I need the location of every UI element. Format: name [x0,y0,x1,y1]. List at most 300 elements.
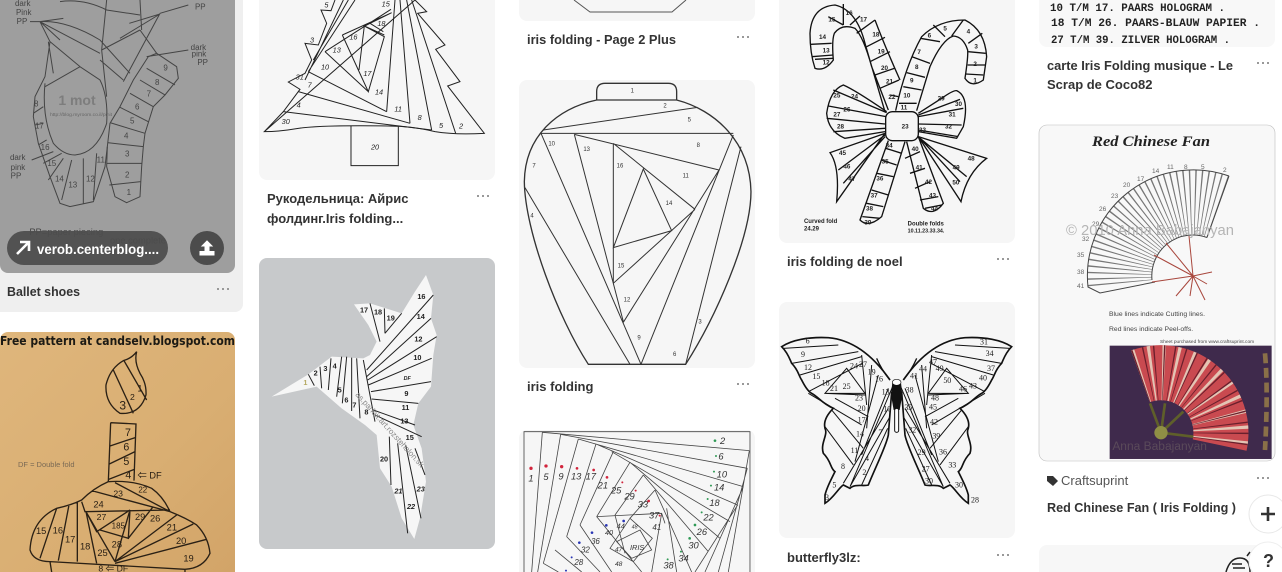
pattern labels: 14 [55,175,64,184]
panel: candle pattern on tan paper: 19 [183,554,194,564]
butterfly drawing: 24 [850,361,858,370]
panel: vase pattern: 10 [548,142,556,148]
spiral drawing: 32 [581,546,590,555]
pattern labels: 4 [124,131,129,140]
panel: candy canes pattern: 10.11.23.33.34. [908,228,945,234]
panel: candy canes pattern: 14 [819,34,827,41]
hummingbird drawing: 3 [323,364,327,373]
panel: christmas tree pin: 10 [321,62,330,71]
legend notes [1109,311,1254,345]
butterfly drawing: 23 [855,393,863,402]
butterfly drawing: 34 [986,349,994,358]
panel: candy canes pattern: 47 [848,176,856,183]
butterfly drawing: 19 [868,367,876,376]
panel: candy canes pattern: 34 [886,142,893,149]
panel: christmas tree pin: 11 [394,104,402,113]
pattern labels: PP [17,17,27,26]
fan diagram: 32 [1082,236,1090,243]
fan diagram [1077,164,1229,300]
butterfly drawing: 40 [979,373,987,382]
spiral drawing: 13 [571,471,582,481]
panel: candy canes pattern: 46 [843,163,851,170]
panel: candy canes pattern: 9 [910,77,914,84]
panel: candy canes pattern: 21 [886,78,894,85]
title: Russian caption: фолдинг.Iris folding... [267,211,403,226]
pattern labels: 6 [135,102,140,111]
butterfly drawing: 13 [882,387,890,396]
butterfly drawing: 29 [918,448,926,457]
icon: more dots [217,288,229,290]
title: iris folding - Page 2 Plus: iris folding - Page 2 Plus [527,32,676,47]
panel: candy canes pattern: 12 [823,59,830,66]
panel: christmas tree pin: 3 [310,36,315,45]
panel: candle pattern on tan paper: 1 [137,384,143,394]
panel: vase pattern: 13 [583,147,591,153]
butterfly drawing: 12 [804,363,812,372]
hummingbird drawing: 9 [404,389,408,398]
panel: vase pattern: 12 [624,298,631,304]
pattern labels: 17 [35,121,44,130]
source row: Craftsuprint: Craftsuprint [1061,473,1129,488]
butterfly drawing: 47 [929,357,937,366]
panel: candy canes pattern: 49 [953,164,960,171]
pattern labels: PP [195,2,206,11]
panel: red Chinese fan pattern [1039,125,1275,515]
panel: candy canes pattern: 22 [888,94,896,101]
pattern labels: 15 [47,159,57,168]
panel: candle pattern on tan paper: 27 [97,512,106,522]
panel: top pattern fragment with title [519,0,755,47]
panel: christmas tree pin: 18 [377,19,386,28]
panel: christmas tree pin: 7 [308,80,313,89]
note: DF = Double fold [18,460,74,469]
fan diagram: 2 [1223,167,1227,174]
pattern labels: 12 [86,175,95,184]
panel: candy canes pattern: 10 [903,93,911,100]
title: iris folding: iris folding [527,379,594,394]
butterfly drawing: 32 [908,425,916,434]
panel: hummingbird pattern [259,258,495,549]
watermark: © 2010 Anna Babajanyan [1066,222,1234,239]
panel: candy canes pattern: 16 [846,10,853,17]
butterfly drawing: 42 [930,417,938,426]
spiral drawing: 17 [586,471,597,481]
icon: more dots [737,36,749,38]
handwritten text: 27 T/M 39. ZILVER HOLOGRAM . [1051,35,1230,47]
panel: christmas tree pin: 5 [439,121,444,130]
panel: candy canes pattern: 40 [912,146,919,153]
panel: candy canes pattern: 39 [864,219,872,226]
butterfly drawing: 17 [858,415,866,424]
spiral drawing: 40 [605,528,614,537]
hummingbird drawing [272,275,437,539]
panel: christmas tree pin: 16 [349,32,358,41]
butterfly drawing: 49 [936,364,944,373]
fan diagram: 14 [1152,168,1160,175]
panel: candy canes pattern: 15 [828,17,836,24]
pattern labels: 7 [147,90,152,99]
panel: candle pattern on tan paper [0,332,235,572]
legend notes: Red lines indicate Peel-offs. [1109,326,1193,333]
pattern labels: PP [197,58,208,67]
fan diagram: 29 [1092,221,1100,228]
panel: candy canes pattern: 50 [952,180,960,187]
panel: christmas tree pin: 4 [297,100,301,109]
spiral drawing: 38 [663,560,675,570]
panel: candy canes pattern: 44 [931,206,939,213]
panel: candy canes pattern: 43 [929,192,937,199]
pattern labels: pink [11,163,25,172]
hummingbird drawing: 20 [380,455,388,464]
panel: christmas tree pin: 8 [418,113,423,122]
butterfly drawing: 5 [832,481,836,490]
panel: christmas tree pin: 13 [333,46,342,55]
panel: candy canes pattern: Double folds [908,221,945,227]
panel: christmas tree pin: 17 [363,69,372,78]
button: help [1249,542,1282,572]
source link pill [7,231,168,265]
fan diagram: 8 [1184,164,1188,171]
panel: candy canes pattern: 24 [851,93,859,100]
butterfly drawing: 37 [987,364,995,373]
spiral drawing: 26 [696,527,708,537]
fan diagram: 38 [1077,269,1085,276]
panel: vase pattern: 9 [637,336,641,342]
hummingbird drawing: 1 [303,378,307,387]
hummingbird drawing: 14 [417,312,426,321]
spiral drawing: 9 [558,471,564,481]
panel: candy canes pattern: 29 [938,96,945,103]
hummingbird drawing: 11 [402,403,409,412]
panel: christmas tree pin [259,0,495,226]
hummingbird drawing: 12 [414,335,422,344]
source link pill: verob.centerblog.... [37,241,159,257]
hummingbird drawing: 7 [352,401,356,410]
butterfly drawing: 38 [906,385,914,394]
pattern labels: 13 [68,180,78,189]
panel: vase pattern: 1 [631,89,635,95]
butterfly drawing: 41 [910,371,918,380]
butterfly drawing: 36 [939,447,947,456]
pattern labels: dark [10,153,26,162]
title: Ballet shoes: Ballet shoes [7,284,80,299]
spiral drawing: 47 [615,547,623,554]
butterfly drawing: 14 [856,430,864,439]
butterfly drawing: 8 [841,462,845,471]
panel: bottom pin fragment [1039,545,1275,572]
panel: candy canes pattern: 28 [837,123,845,130]
panel: vase pattern: 5 [688,118,692,124]
panel: candy canes pattern: 36 [876,175,884,182]
icon: more dots [477,195,489,197]
butterfly drawing: 6 [806,337,810,346]
panel: candy canes pattern: 2 [973,61,977,68]
panel: candy canes pattern: 38 [866,205,874,212]
panel: candy canes pattern: 4 [967,28,971,35]
panel: vase pattern: 2 [663,103,667,109]
hummingbird drawing: as.parfait.art.rozstehalon.sk [354,390,426,469]
fan diagram: 20 [1123,182,1131,189]
panel: handwritten notes pin [1039,0,1275,92]
spiral drawing: 48 [615,561,623,568]
spiral drawing: 14 [714,483,724,493]
spiral drawing: 29 [623,491,635,501]
butterfly drawing: 43 [969,381,977,390]
hummingbird drawing: 23 [416,485,425,494]
panel: candle pattern on tan paper: 24 [93,499,104,509]
panel: candle pattern on tan paper: 4 [125,469,131,481]
fan diagram: 35 [1077,252,1085,259]
hummingbird drawing: 10 [413,353,421,362]
butterfly drawing: 30 [955,480,963,489]
panel: candy canes pattern: 41 [916,165,923,172]
spiral drawing: 34 [678,554,689,564]
panel: candle pattern on tan paper: 185 [112,521,126,530]
butterfly drawing: 10 [883,405,891,414]
butterfly drawing: 45 [929,403,937,412]
panel: christmas tree pin: 30 [282,117,291,126]
panel: christmas tree pin: 14 [375,88,383,97]
fan diagram: 17 [1137,176,1145,183]
candy canes drawing [810,4,987,223]
pattern labels: dark [191,43,206,52]
panel: vase pattern: 6 [673,352,677,358]
legend notes: Blue lines indicate Cutting lines. [1109,311,1205,318]
caption: Free pattern at candselv.blogspot.com [0,333,235,348]
panel: vase pattern: 16 [617,164,624,170]
panel: candy canes pattern: 35 [882,158,889,165]
panel: candy canes pattern: 7 [917,49,921,56]
panel: candy canes pattern: 27 [833,112,841,119]
panel: candy canes pattern [779,0,1015,269]
butterfly drawing: 35 [904,403,912,412]
panel: christmas tree pin: 2 [458,122,463,131]
panel: christmas tree pin: 5 [324,0,329,9]
panel: spiral pattern [519,430,755,572]
pattern labels: 16 [41,143,50,152]
panel: candle pattern on tan paper: 22 [138,486,148,495]
spiral drawing: 37 [649,510,660,520]
panel: candle pattern on tan paper: 17 [65,535,75,545]
butterfly drawing: 3 [825,493,829,502]
panel: christmas tree pin: 20 [370,142,380,151]
pattern labels: pink [192,50,206,59]
pattern labels: 9 [163,64,168,73]
panel: candle pattern on tan paper: 26 [150,514,160,524]
spiral drawing: 25 [610,485,622,495]
pattern labels: 11 [97,156,106,165]
spiral drawing: 18 [709,498,721,508]
panel: candy canes pattern: 33 [919,127,927,134]
panel: candy canes pattern: 11 [901,104,908,111]
panel: candy canes pattern: 32 [945,124,953,131]
butterfly drawing: 27 [859,360,867,369]
panel: candy canes pattern: 8 [915,64,919,71]
candle drawing [30,352,210,572]
spiral drawing: 30 [688,540,700,550]
hummingbird drawing: 5 [338,385,342,394]
pattern labels: 8 [34,100,39,109]
hummingbird drawing: 17 [360,305,368,314]
fan diagram: 5 [1201,164,1205,171]
pattern labels: 3 [125,150,130,159]
butterfly drawing: 50 [943,376,951,385]
butterfly drawing: 16 [875,375,883,384]
icon: diagonal arrow [17,242,29,254]
butterfly drawing: 21 [830,384,838,393]
panel: christmas tree pin: 31 [296,72,304,81]
panel: candy canes pattern: 48 [968,156,975,163]
butterfly drawing: 33 [948,461,956,470]
hummingbird drawing: DF [404,376,411,382]
butterfly drawing: 31 [980,337,988,346]
icon: more dots [1257,477,1269,479]
butterfly drawing: 2 [862,468,866,477]
fan photo: Anna Babajanyan [1112,439,1207,453]
hummingbird drawing: 21 [393,486,402,495]
pattern labels: PP=paper piecing [29,227,103,237]
hummingbird drawing: 13 [400,416,408,425]
pattern labels: 8 [155,78,160,87]
hummingbird drawing: 15 [406,433,414,442]
panel: candy canes pattern: 25 [833,92,841,99]
panel: candy canes pattern: 26 [843,107,851,114]
spiral drawing: 41 [652,523,661,532]
panel: candle pattern on tan paper: 23 [113,489,123,499]
spiral drawing [524,432,750,572]
hummingbird drawing: 19 [387,314,395,323]
icon: more dots [737,383,749,385]
panel: candle pattern on tan paper: 5 [123,456,129,468]
spiral drawing: 28 [573,558,584,567]
pattern labels: 1 mot [58,92,96,108]
butterfly drawing: 18 [822,379,830,388]
fan heading: Red Chinese Fan [1091,134,1210,150]
pattern: tree drawing [264,0,484,166]
hummingbird drawing: 6 [344,396,348,405]
panel: candy canes pattern: 30 [955,101,963,108]
butterfly drawing: 46 [959,385,967,394]
fan diagram: 11 [1167,164,1174,171]
panel: candle pattern on tan paper: 25 [97,548,108,558]
butterfly drawing: 20 [858,404,866,413]
fan diagram: 41 [1077,283,1085,290]
panel: butterfly pattern [779,302,1015,565]
spiral drawing: 44 [617,521,625,530]
panel: ballet shoes pin [0,0,243,312]
panel: candle pattern on tan paper: 29 [135,512,145,522]
panel: candle pattern on tan paper: ⇐ DF [137,470,162,480]
panel: candy canes pattern: 5 [943,26,947,33]
panel: candy canes pattern: 23 [902,123,909,130]
spiral drawing: 21 [597,480,608,490]
title: Russian caption: Рукодельница: Айрис [267,191,408,206]
icon: tag [1047,476,1058,486]
butterfly drawing: 48 [931,393,939,402]
panel: candy canes pattern: 31 [949,111,956,118]
spiral drawing: 5 [543,472,549,482]
hummingbird drawing: 18 [374,307,382,316]
spiral drawing: 48 [632,524,638,530]
hummingbird drawing: 4 [333,361,338,370]
butterfly drawing: 27 [922,465,930,474]
butterfly drawing: 15 [812,372,820,381]
panel: candle pattern on tan paper: 7 [125,427,131,439]
panel: candy canes pattern: 37 [871,192,878,199]
panel: candle pattern on tan paper: 6 [123,442,129,454]
butterfly drawing: 30 [925,476,933,485]
pattern labels: 2 [125,170,130,179]
title: carte Iris Folding musique: Scrap de Coco82 [1047,77,1152,92]
hummingbird drawing: 8 [364,407,368,416]
panel: candy canes pattern: 20 [881,65,889,72]
panel: vase pattern: 7 [532,163,536,169]
spiral drawing: 2 [719,436,726,446]
hummingbird drawing: 16 [417,292,425,301]
panel: candy canes pattern: 6 [928,33,932,40]
spiral drawing: 1 [528,474,534,484]
panel: candy canes pattern: 3 [974,43,978,50]
icon: more dots [997,554,1009,556]
panel: candle pattern on tan paper: 15 [36,526,46,536]
pattern labels: Pink [16,8,32,17]
hummingbird drawing: 2 [314,369,318,378]
legend notes: Sheet purchased from www.craftsuprint.com [1160,339,1254,345]
spiral drawing: 36 [591,537,600,546]
butterfly drawing: 39 [932,431,940,440]
panel: candy canes pattern: 24.29 [804,226,820,232]
panel: candle pattern on tan paper: 28 [112,539,122,549]
butterfly drawing: 11 [851,446,858,455]
panel: candle pattern on tan paper: 18 [80,541,90,551]
panel: candy canes pattern: 18 [872,32,880,39]
panel: candy canes pattern: 1 [973,78,977,85]
panel: candle pattern on tan paper: 21 [167,523,177,533]
panel: candy canes pattern: 45 [839,150,847,157]
pattern labels: PP [11,171,21,180]
butterfly drawing: 4 [865,454,869,463]
panel: vase pattern [519,80,755,394]
panel: vase pattern: 8 [697,143,701,149]
pattern labels: http://blog.myroom.co.il/pinit [50,112,113,118]
panel: vase pattern: 3 [698,320,702,326]
panel: candy canes pattern: Curved fold [804,219,838,225]
pattern labels: 1 [127,188,132,197]
fan diagram: 23 [1111,193,1119,200]
panel: vase pattern: 4 [530,213,534,219]
panel: candy canes pattern: 42 [925,179,933,186]
icon: share button [190,231,224,265]
butterfly drawing [782,337,1012,504]
panel: vase pattern: 14 [666,201,673,207]
panel: candle pattern on tan paper: 2 [130,392,135,402]
spiral drawing: 10 [717,469,728,479]
handwritten text [1050,3,1260,47]
panel: vase pattern: 15 [618,264,625,270]
spiral drawing: 6 [718,451,724,461]
panel: candy canes pattern: 13 [823,47,830,54]
icon: more dots [997,258,1009,260]
butterfly drawing: 7 [878,428,882,437]
pattern labels: one complete [110,235,166,245]
hummingbird drawing: 22 [406,502,415,511]
fan photo [1110,346,1272,459]
title: Red Chinese Fan: Red Chinese Fan ( Iris Folding ) [1047,500,1236,515]
fan diagram: 26 [1099,206,1107,213]
spiral drawing: IRIS [630,543,644,552]
title: butterfly3lz: butterfly3lz: [787,550,861,565]
panel: candle pattern on tan paper: 20 [176,536,186,546]
